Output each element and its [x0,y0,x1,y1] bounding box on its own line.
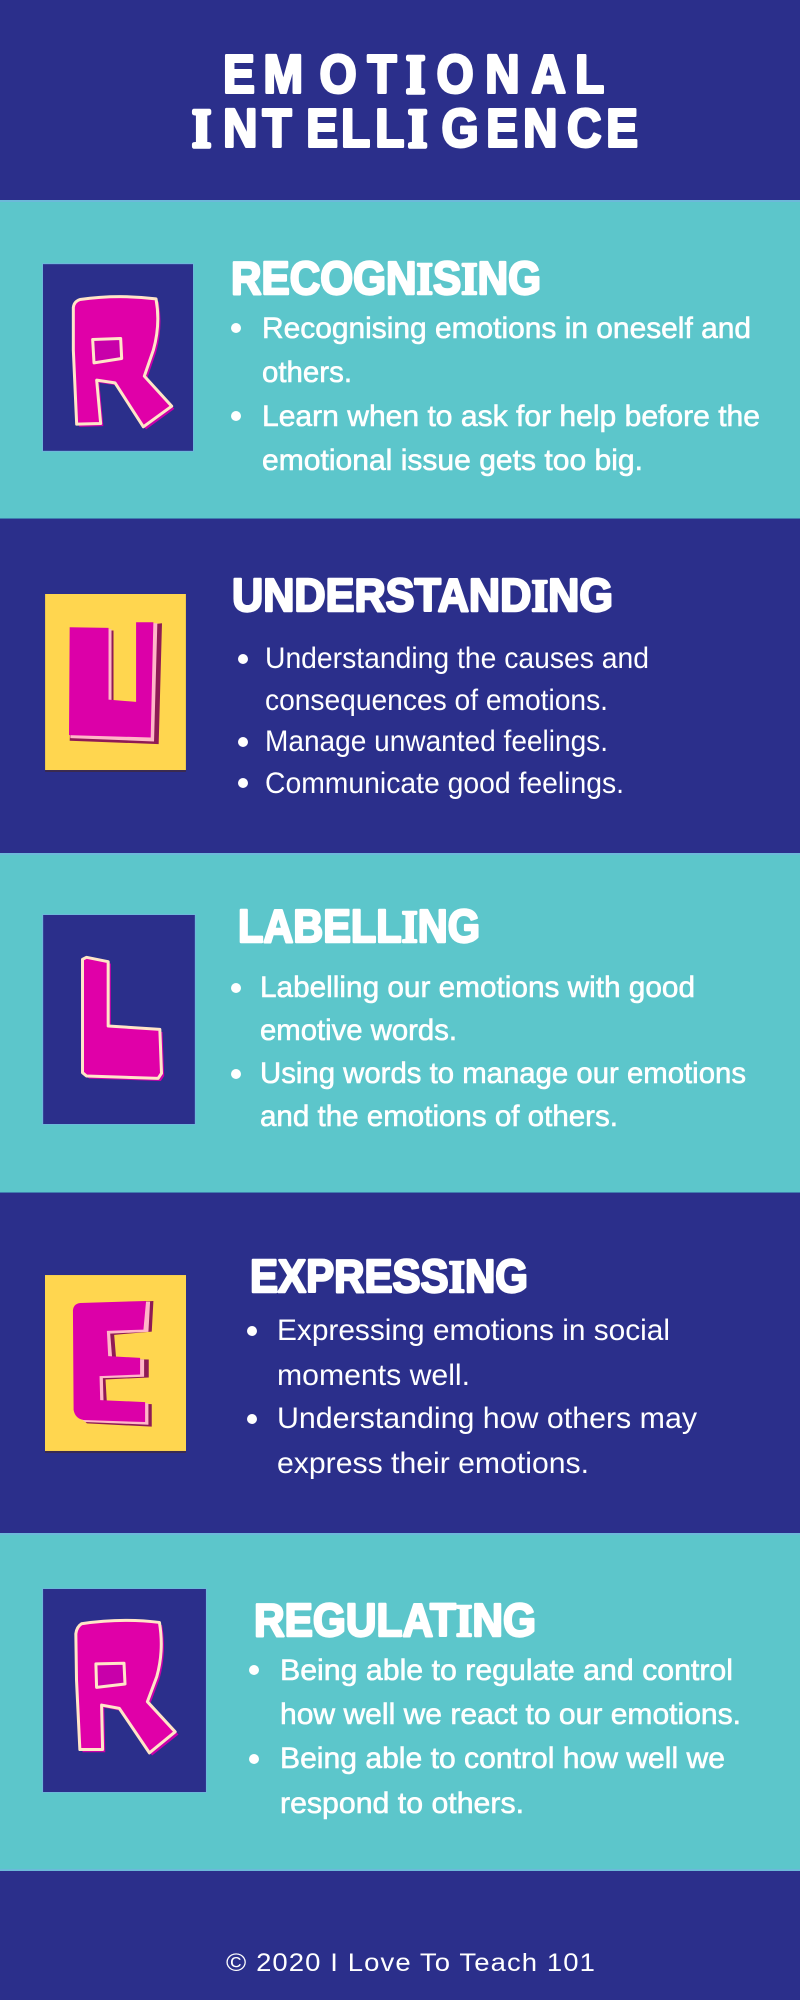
bullet list: understanding [238,642,649,800]
panel: understanding [45,569,649,800]
icon: letter U tile [45,594,186,772]
bullet list: expressing: Expressing emotions in social [277,1314,670,1347]
bullet list: labelling: Using words to manage our emotions [260,1057,746,1090]
title: EMOTIONAL [223,44,604,105]
title: INTELLI GENCE [192,98,638,159]
heading: expressing: EXPRESSING [250,1250,528,1302]
bullet list: understanding: Understanding the causes and [265,642,649,675]
bullet list: expressing: moments well. [277,1359,470,1392]
title [192,44,638,159]
bullet list: understanding: Manage unwanted feelings. [265,725,608,758]
icon: letter R tile [43,264,193,451]
panel: regulating [0,1533,800,1871]
bullet list: recognising: emotional issue gets too big. [262,444,643,477]
bullet list: regulating: Being able to regulate and control [280,1654,733,1687]
bullet list: regulating: Being able to control how well we [280,1742,725,1775]
bullet list: recognising [231,312,760,477]
icon: letter L tile [43,915,195,1124]
bullet list: understanding: Communicate good feelings. [265,767,624,800]
bullet list: labelling: and the emotions of others. [260,1100,618,1133]
bullet list: regulating [249,1654,741,1820]
bullet list: labelling [231,971,746,1133]
bullet list: regulating: how well we react to our emotions. [280,1698,741,1731]
footer credit: © 2020 I Love To Teach 101 [226,1949,596,1977]
bullet list: labelling: Labelling our emotions with good [260,971,695,1004]
bullet list: recognising: Learn when to ask for help before the [262,400,760,433]
bullet list: expressing: express their emotions. [277,1447,589,1480]
heading: labelling: LABELLING [238,900,480,952]
panel: expressing [45,1250,697,1480]
heading: recognising: RECOGNISING [231,252,541,304]
panel: labelling [0,853,800,1193]
icon: letter E tile [45,1275,186,1453]
bullet list: regulating: respond to others. [280,1787,524,1820]
icon: letter R tile [43,1589,206,1792]
bullet list: understanding: consequences of emotions. [265,684,608,717]
heading: regulating: REGULATING [254,1594,536,1646]
bullet list: recognising: others. [262,356,352,389]
panel: recognising [0,200,800,519]
bullet list: recognising: Recognising emotions in oneself and [262,312,751,345]
heading: understanding: UNDERSTANDING [232,569,613,621]
bullet list: expressing [247,1314,697,1480]
bullet list: labelling: emotive words. [260,1014,457,1047]
bullet list: expressing: Understanding how others may [277,1402,697,1435]
